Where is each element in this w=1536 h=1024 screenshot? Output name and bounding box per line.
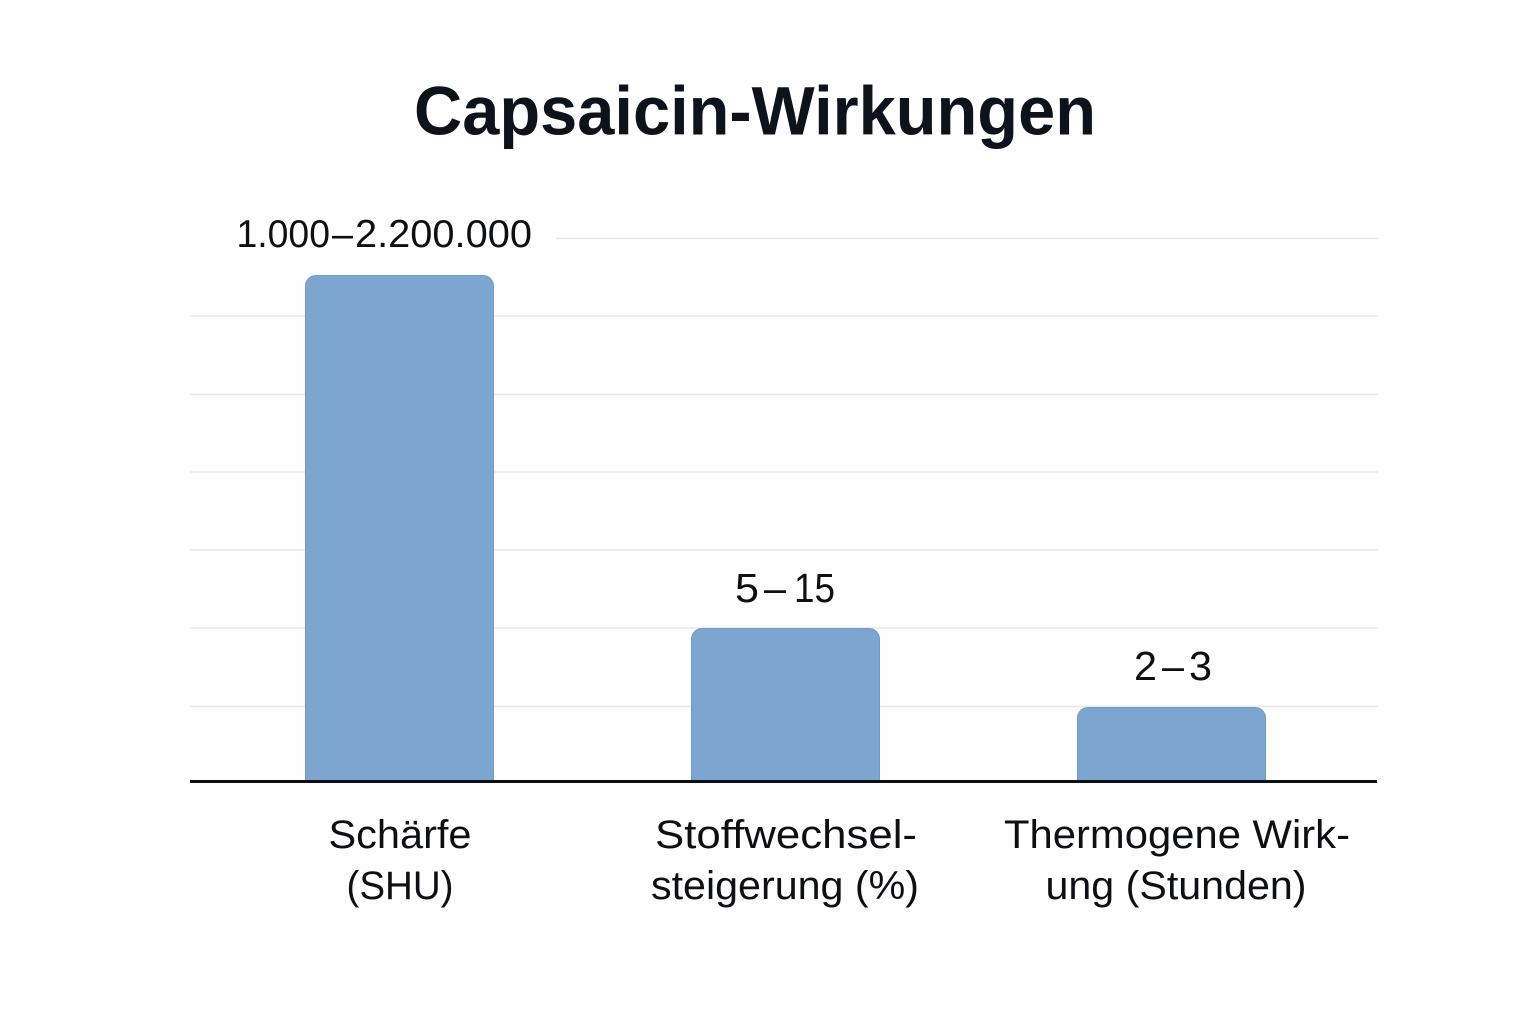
category label: Thermogene Wirkung: Thermogene Wirk- — [1004, 813, 1350, 857]
bar chart — [190, 213, 1378, 908]
value label: Schärfe: – — [332, 213, 353, 256]
value label: Stoffwechselsteigerung: 15 — [794, 565, 835, 611]
category label: Stoffwechselsteigerung: steigerung (%) — [651, 864, 919, 908]
category label: Stoffwechselsteigerung: Stoffwechsel- — [655, 813, 917, 857]
category label: Schärfe: (SHU) — [346, 864, 454, 908]
title: Capsaicin-Wirkungen — [414, 72, 1096, 150]
value label: Schärfe: 1.000 — [236, 213, 330, 256]
value label: Schärfe: 2.200.000 — [355, 213, 532, 256]
category label: Schärfe: Schärfe — [328, 813, 472, 857]
value label: Stoffwechselsteigerung: – — [764, 565, 786, 611]
bar: Schärfe — [306, 276, 494, 781]
value label: Stoffwechselsteigerung: 5 — [735, 565, 759, 611]
category label: Thermogene Wirkung: ung (Stunden) — [1046, 864, 1306, 908]
value label: Thermogene Wirkung: 2 — [1134, 643, 1157, 689]
bar: Stoffwechselsteigerung — [692, 628, 880, 781]
x axis — [190, 780, 1377, 783]
value label: Thermogene Wirkung: 3 — [1189, 643, 1212, 689]
bar: Thermogene Wirkung — [1078, 708, 1266, 781]
value label: Thermogene Wirkung: – — [1162, 643, 1184, 689]
